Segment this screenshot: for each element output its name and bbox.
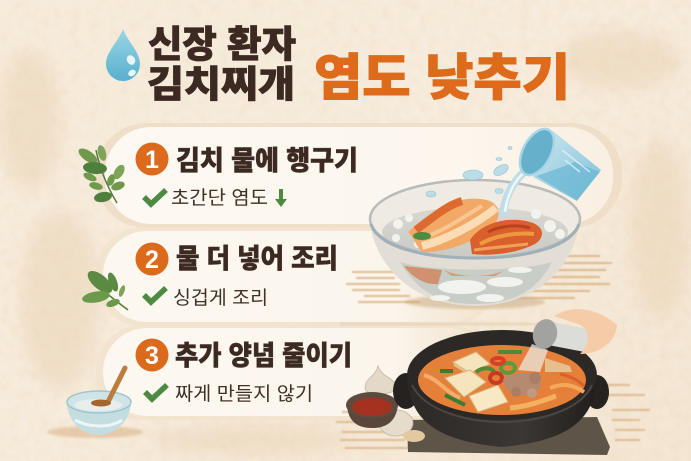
sauce bowl	[346, 392, 398, 428]
wood table streaks: lower	[336, 324, 650, 448]
illustration: salt bowl with wooden spoon	[47, 368, 143, 438]
peppers and greens	[440, 352, 522, 405]
minced meat	[503, 372, 541, 398]
step 1 detail text: 초간단 염도	[171, 187, 268, 209]
pot body	[407, 375, 597, 447]
garlic	[365, 366, 425, 442]
illustration: kimchi stew pot	[346, 309, 617, 455]
step 2 number	[136, 242, 168, 276]
icon: herb sprig 1	[76, 144, 127, 203]
step 3 heading: 추가 양념 줄이기	[175, 341, 352, 371]
step 2 heading: 물 더 넣어 조리	[176, 244, 338, 274]
tofu	[445, 352, 572, 412]
stew	[418, 345, 586, 415]
measuring cup	[513, 123, 601, 201]
step 3 detail text: 짜게 만들지 않기	[175, 383, 313, 405]
step 1 heading: 김치 물에 행구기	[176, 146, 358, 176]
step 2 number: 2	[145, 246, 159, 274]
water droplets	[426, 146, 512, 197]
bowl body	[370, 222, 579, 306]
pot handles	[393, 373, 419, 409]
rim	[370, 180, 580, 258]
illustration: glass bowl of kimchi	[370, 123, 601, 309]
water stream	[503, 168, 530, 216]
panel: step 1	[96, 123, 622, 228]
title	[106, 24, 570, 106]
panel: step 2	[96, 227, 496, 326]
trivet	[407, 417, 610, 455]
water	[382, 207, 568, 257]
wood table streaks: upper	[346, 256, 612, 302]
lower bowl contents	[400, 262, 552, 304]
salt shaker and hand	[518, 309, 617, 372]
step 2 check icon	[144, 288, 166, 302]
icon: water drop	[106, 29, 140, 81]
title highlight: 염도 낮추기	[314, 50, 570, 106]
icon: herb sprig 2	[81, 267, 128, 310]
step 1 check icon	[144, 190, 166, 204]
table shadow	[405, 295, 545, 309]
title line 2: 김치찌개	[147, 64, 295, 105]
step 1 number	[136, 142, 168, 176]
wooden spoon	[91, 368, 125, 406]
panel: step 3	[96, 325, 496, 420]
step 3 check icon	[145, 385, 167, 399]
cabbage kimchi	[408, 199, 542, 255]
title line 1: 신장 환자	[148, 24, 296, 65]
step 1 number: 1	[145, 146, 159, 174]
step 3 number	[136, 338, 168, 372]
icon: down arrow	[275, 189, 287, 207]
step 2 detail text: 싱겁게 조리	[173, 287, 268, 309]
step 3 number: 3	[145, 342, 159, 370]
